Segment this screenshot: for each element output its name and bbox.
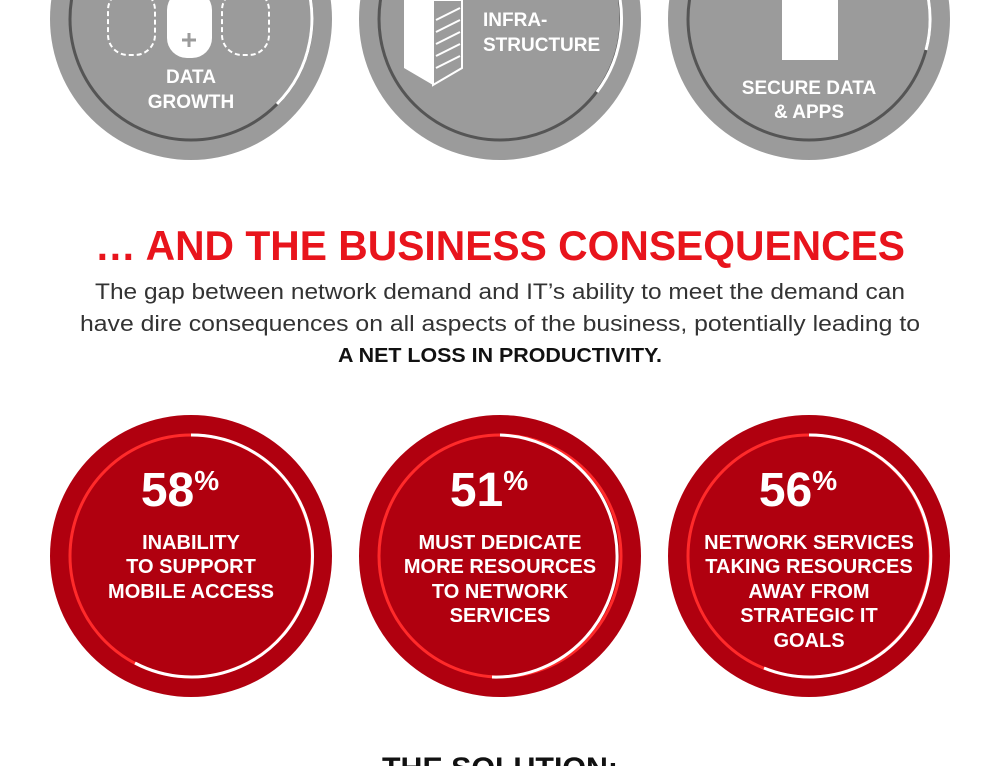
label: data growth: DATA <box>166 67 216 88</box>
text block: intro: have dire consequences on all aspects of the business, potentially leading to <box>80 311 920 336</box>
panel: stat 58%: INABILITY <box>142 532 241 554</box>
heading: … AND THE BUSINESS CONSEQUENCES <box>95 222 905 269</box>
icon: building <box>404 0 462 85</box>
panel: stat 56%: NETWORK SERVICES <box>704 532 914 554</box>
panel: data growth <box>50 0 332 160</box>
panel: stat 56%: 56 <box>759 464 812 517</box>
panel: infrastructure: STRUCTURE <box>483 35 600 56</box>
panel: stat 51%: TO NETWORK <box>432 581 569 603</box>
icon: database cylinders <box>108 0 269 58</box>
text block: intro <box>80 279 920 367</box>
text block: intro: The gap between network demand and IT’s ability to meet the demand can <box>95 279 905 304</box>
panel: stat 51%: 51 <box>450 464 503 517</box>
text block: intro: A NET LOSS IN PRODUCTIVITY. <box>338 345 662 367</box>
panel: stat 51% <box>359 415 641 697</box>
label: secure data: SECURE DATA <box>742 78 876 99</box>
panel: stat 58%: % <box>194 465 219 496</box>
panel: stat 56%: AWAY FROM <box>748 581 870 603</box>
panel: stat 56%: TAKING RESOURCES <box>705 556 913 578</box>
panel: stat 51%: % <box>503 465 528 496</box>
panel: stat 51%: MORE RESOURCES <box>404 556 596 578</box>
panel: stat 56% <box>668 415 950 697</box>
label: infrastructure: INFRA- <box>483 10 547 31</box>
panel: stat 51%: MUST DEDICATE <box>419 532 581 554</box>
panel: secure data: & APPS <box>774 102 844 123</box>
panel: stat 56%: STRATEGIC IT <box>740 605 878 627</box>
panel: stat 56%: GOALS <box>773 630 845 652</box>
panel: stat 51%: SERVICES <box>450 605 550 627</box>
panel: stat 58%: 58 <box>141 464 194 517</box>
panel: secure data <box>668 0 950 160</box>
panel: stat 58% <box>50 415 332 697</box>
panel: stat 56%: % <box>812 465 837 496</box>
panel: data growth: GROWTH <box>148 92 234 113</box>
panel: infrastructure <box>359 0 641 160</box>
panel: stat 58%: MOBILE ACCESS <box>108 581 274 603</box>
icon: lock <box>782 0 838 60</box>
panel: stat 58%: TO SUPPORT <box>126 556 256 578</box>
